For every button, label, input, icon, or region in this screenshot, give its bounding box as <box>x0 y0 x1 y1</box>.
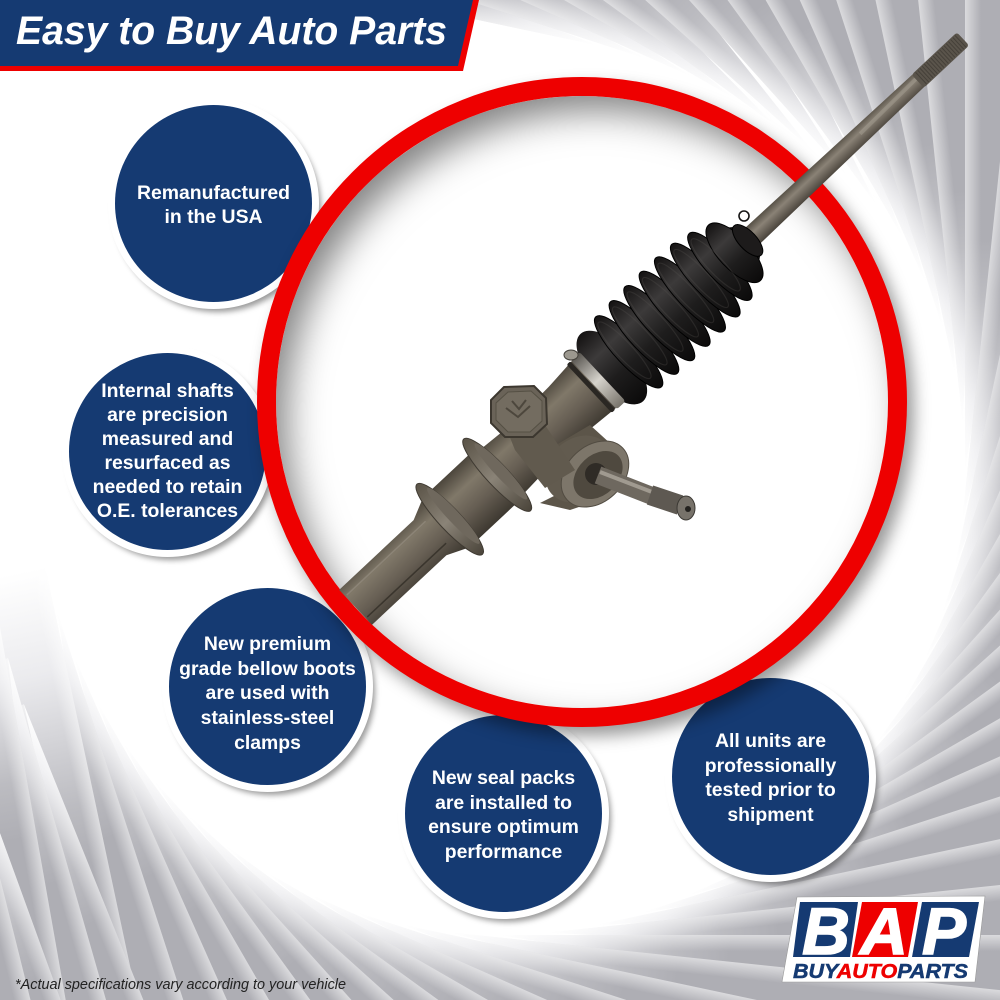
BAP logo: P <box>922 894 967 968</box>
callout: bellow boots <box>169 588 366 785</box>
callout text: resurfaced as <box>104 452 231 474</box>
callout text: clamps <box>234 732 301 754</box>
callout text: are installed to <box>435 792 572 814</box>
callout text <box>705 730 836 826</box>
callout: tested units <box>672 678 869 875</box>
clamp screw <box>564 350 578 360</box>
callout text: shipment <box>727 804 814 826</box>
callout text: tested prior to <box>705 779 836 801</box>
callout text: All units are <box>715 730 826 752</box>
callout text <box>137 182 290 228</box>
pinion shaft <box>598 472 695 520</box>
callout text: measured and <box>102 428 233 450</box>
callout text <box>93 380 242 522</box>
callout text <box>428 767 579 863</box>
callout: internal shafts <box>69 353 266 550</box>
callout text: grade bellow boots <box>179 658 356 680</box>
spring clip <box>739 211 749 221</box>
callout text: needed to retain <box>93 476 242 498</box>
filler plug <box>491 386 575 488</box>
callout text: New premium <box>204 633 331 655</box>
callout text: ensure optimum <box>428 816 579 838</box>
callout text: New seal packs <box>432 767 575 789</box>
callout: seal packs <box>405 715 602 912</box>
callout text: Internal shafts <box>101 380 234 402</box>
callout text: O.E. tolerances <box>97 500 238 522</box>
flange 1 <box>409 477 491 562</box>
pinion housing <box>531 422 642 520</box>
BAP logo: B <box>802 894 850 968</box>
callout text: professionally <box>705 755 836 777</box>
BAP logo: A <box>858 894 908 968</box>
footnote: *Actual specifications vary according to your vehicle <box>15 977 346 993</box>
callout: remanufactured in the USA <box>115 105 312 302</box>
callout text: performance <box>445 841 562 863</box>
shaft <box>736 31 971 252</box>
red ring with white disc <box>257 77 907 727</box>
bellow boot <box>562 198 788 419</box>
callout text: in the USA <box>164 206 263 228</box>
hose clamp <box>566 352 626 414</box>
callout text <box>179 633 356 754</box>
BAP logo: BUYAUTOPARTS <box>793 961 969 983</box>
callout text: are used with <box>206 682 329 704</box>
flange 2 <box>456 432 539 518</box>
callout text: Remanufactured <box>137 182 290 204</box>
callout text: stainless-steel <box>201 707 334 729</box>
title: Easy to Buy Auto Parts <box>16 9 447 53</box>
callout text: are precision <box>107 404 228 426</box>
tube and rack housing <box>332 352 625 632</box>
